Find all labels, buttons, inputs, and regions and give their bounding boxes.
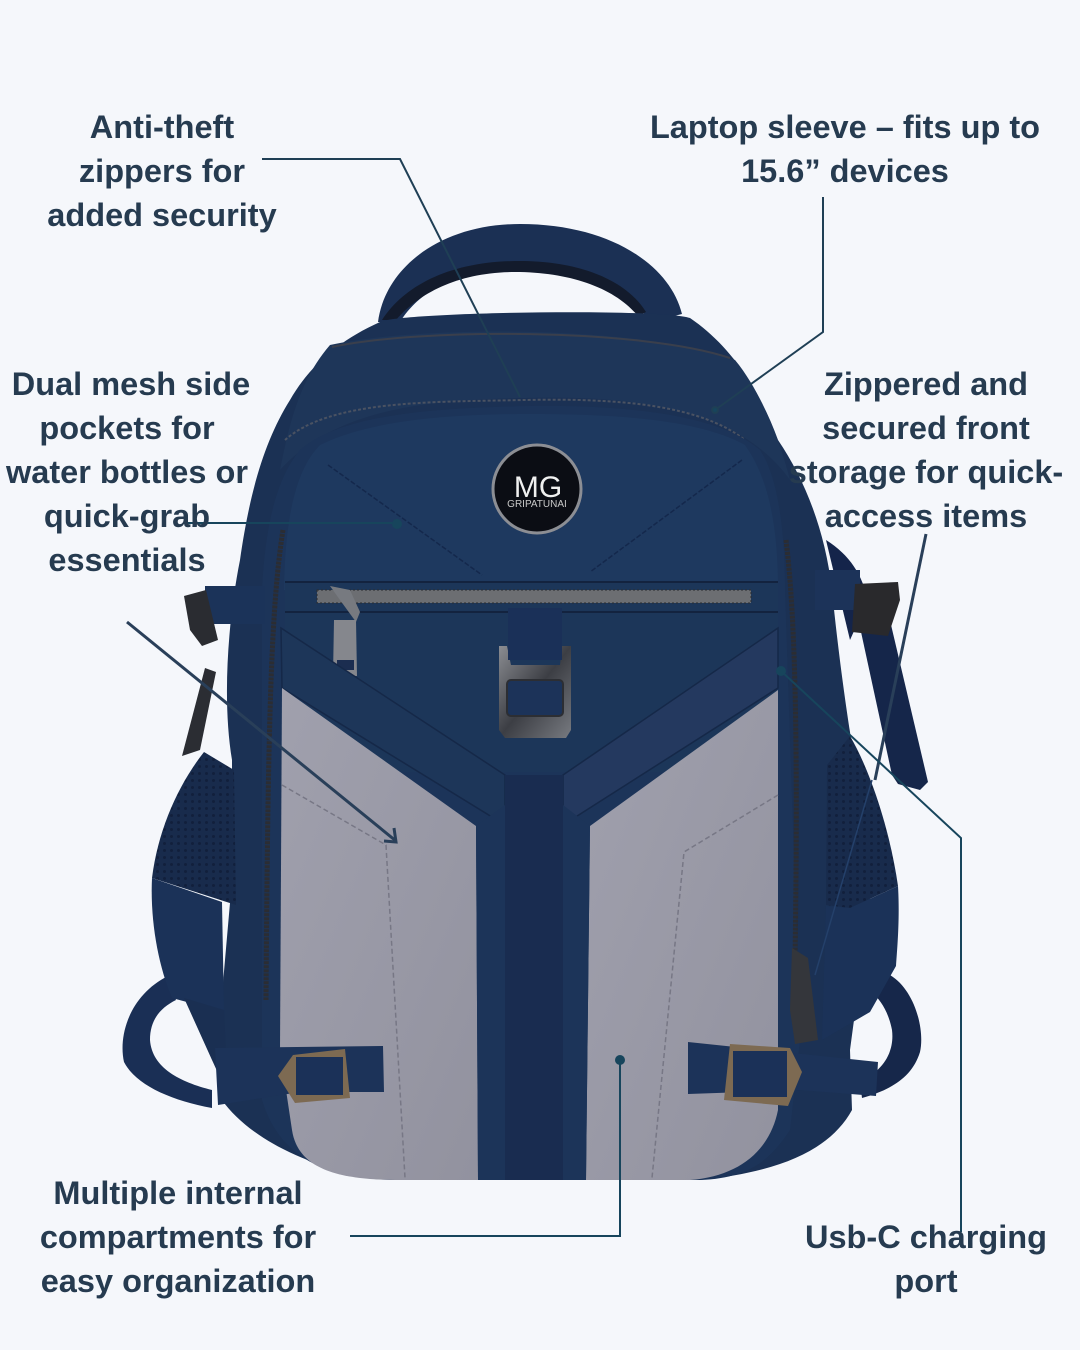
- icon: logo badge: [493, 445, 581, 533]
- text: anti-theft zippers: Anti-theft: [90, 109, 234, 145]
- arrow: front storage pointer: [185, 519, 402, 529]
- front panel: [262, 406, 800, 1180]
- text: zippered front storage: Zippered and: [824, 366, 1028, 402]
- gray right panel: [586, 690, 778, 1180]
- icon: right side clip: [790, 570, 900, 1044]
- icon: center buckle: [499, 608, 571, 738]
- text: zippered front storage: secured front: [822, 410, 1030, 446]
- text: dual mesh side pockets: [6, 366, 250, 578]
- icon: side mesh pockets: [152, 736, 899, 1095]
- arrow: internal compartments connector: [350, 1055, 625, 1236]
- icon: logo badge: MG: [514, 471, 562, 504]
- text: dual mesh side pockets: Dual mesh side: [12, 366, 250, 402]
- text: laptop sleeve: 15.6” devices: [741, 153, 949, 189]
- text: internal compartments: [40, 1175, 316, 1299]
- chevron bands: [281, 628, 505, 825]
- arrow: zipped storage connector: [815, 534, 926, 975]
- icon: back straps: [123, 540, 928, 1108]
- text: dual mesh side pockets: quick-grab: [44, 498, 210, 534]
- text: USB-C charging port: [805, 1219, 1047, 1299]
- text: zippered front storage: storage for quick-: [789, 454, 1063, 490]
- icon: left side clip: [182, 586, 265, 756]
- text: USB-C charging port: Usb-C charging: [805, 1219, 1047, 1255]
- center strip: [505, 775, 563, 1180]
- main zip side lines: [266, 530, 283, 1000]
- text: internal compartments: Multiple internal: [53, 1175, 303, 1211]
- icon: front zipper: [317, 586, 751, 676]
- text: anti-theft zippers: zippers for: [79, 153, 245, 189]
- text: USB-C charging port: port: [894, 1263, 958, 1299]
- arrow: USB-C connector: [776, 666, 961, 1232]
- text: dual mesh side pockets: essentials: [48, 542, 206, 578]
- backpack: [123, 224, 928, 1180]
- stitches on panel: [328, 460, 742, 575]
- arrow: mesh pocket pointer: [127, 622, 396, 842]
- text: laptop sleeve: Laptop sleeve – fits up to: [650, 109, 1040, 145]
- text: internal compartments: compartments for: [40, 1219, 316, 1255]
- icon: lower right strap and buckle: [688, 1042, 878, 1106]
- text: laptop sleeve: [650, 109, 1040, 189]
- text: anti-theft zippers: added security: [47, 197, 277, 233]
- gray left panel: [280, 688, 478, 1180]
- icon: lower left strap and buckle: [215, 1046, 384, 1105]
- top layers: [280, 331, 790, 480]
- icon: top handle: [378, 224, 682, 322]
- text: dual mesh side pockets: water bottles or: [6, 454, 248, 490]
- text: zippered front storage: access items: [825, 498, 1027, 534]
- icon: logo badge: GRIPATUNAI: [507, 499, 567, 510]
- text: dual mesh side pockets: pockets for: [39, 410, 215, 446]
- backpack body: [218, 312, 870, 1180]
- text: internal compartments: easy organization: [41, 1263, 315, 1299]
- arrow: laptop sleeve connector: [712, 197, 823, 413]
- arrow: anti-theft connector: [262, 159, 520, 397]
- text: anti-theft zippers: [47, 109, 277, 233]
- text: zippered front storage: [789, 366, 1063, 534]
- pocket band: [285, 582, 778, 772]
